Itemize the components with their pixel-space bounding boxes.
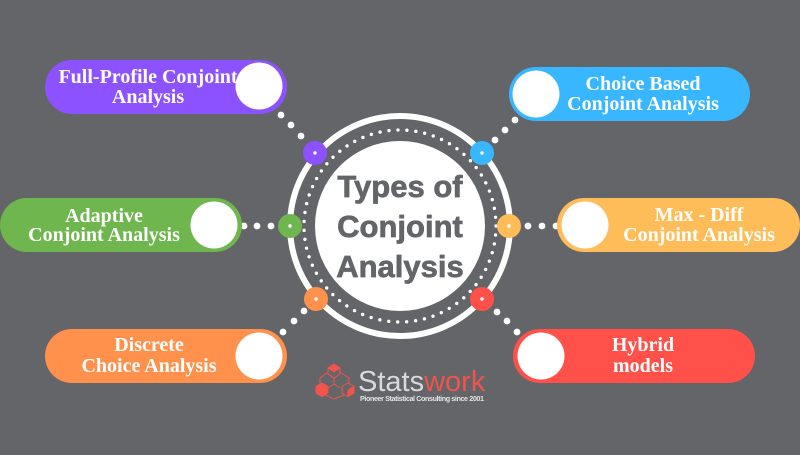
central title: Types of: [337, 169, 463, 204]
logo: Statswork: [316, 364, 486, 403]
node: yellow: [497, 214, 521, 238]
panel: Choice Based Conjoint Analysis: Choice Based: [586, 73, 700, 95]
panel: Hybrid models: models: [613, 355, 673, 377]
central title: Analysis: [336, 249, 464, 284]
panel: Max - Diff Conjoint Analysis: Max - Diff: [655, 204, 744, 226]
node: green: [278, 214, 302, 238]
panel: Max - Diff Conjoint Analysis: [557, 198, 800, 252]
node: red: [470, 287, 494, 311]
panel: Max - Diff Conjoint Analysis: Conjoint Analysis: [623, 224, 775, 246]
icon: cubes: [316, 364, 354, 399]
panel: Choice Based Conjoint Analysis: [509, 67, 750, 121]
central title: Conjoint: [337, 209, 463, 244]
panel: Discrete Choice Analysis: [45, 329, 287, 383]
node: orange: [304, 287, 328, 311]
logo: Statswork: Statswork: [358, 366, 486, 398]
panel: Adaptive Conjoint Analysis: Adaptive: [65, 205, 143, 227]
panel: Discrete Choice Analysis: Discrete: [114, 334, 184, 356]
panel: Full-Profile Conjoint Analysis: Full-Profile Conjoint: [58, 66, 238, 88]
node: purple: [303, 141, 327, 165]
dotted ring: [304, 130, 496, 322]
node: blue: [470, 141, 494, 165]
connector dots: [241, 112, 559, 335]
panel: Adaptive Conjoint Analysis: Conjoint Analysis: [28, 224, 180, 246]
panel: Full-Profile Conjoint Analysis: [45, 60, 287, 114]
central title: [315, 141, 485, 311]
panel: Discrete Choice Analysis: Choice Analysis: [81, 355, 217, 377]
logo: Statswork: Pioneer Statistical Consulting since 2001: [360, 394, 484, 403]
panel: Hybrid models: Hybrid: [612, 334, 674, 356]
panel: Hybrid models: [513, 329, 755, 383]
panel: Full-Profile Conjoint Analysis: Analysis: [112, 86, 184, 108]
panel: Adaptive Conjoint Analysis: [0, 198, 242, 252]
central ring: [290, 116, 510, 336]
panel: Choice Based Conjoint Analysis: Conjoint Analysis: [567, 93, 719, 115]
